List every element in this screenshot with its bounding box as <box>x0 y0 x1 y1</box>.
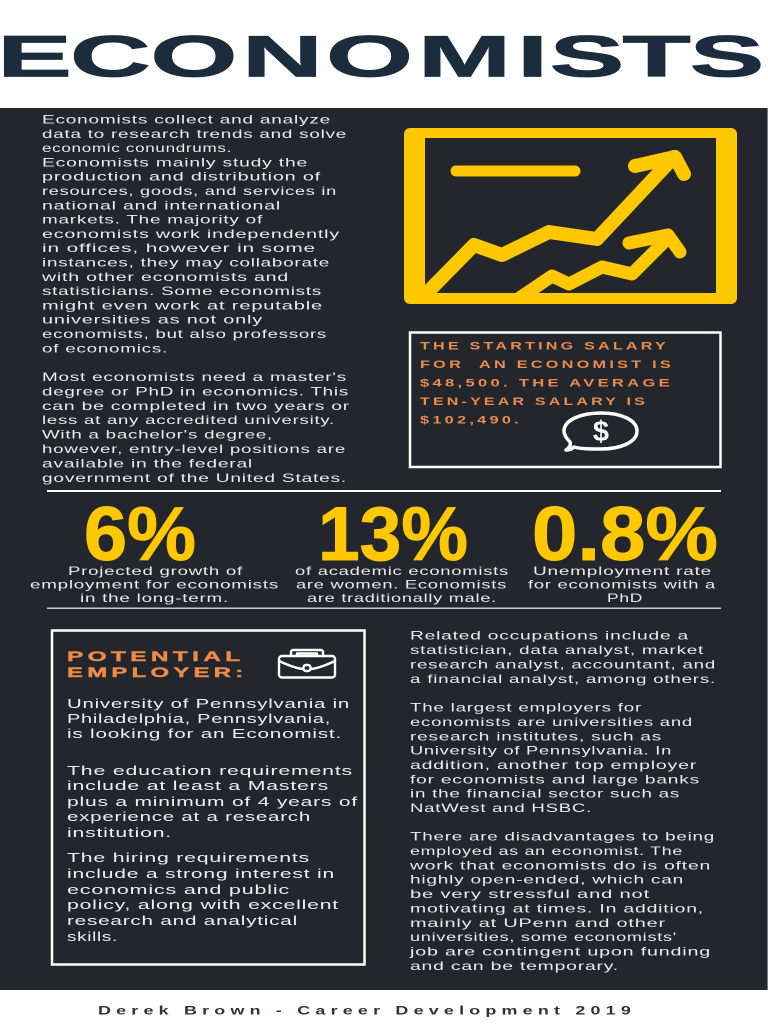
panel: starting salary <box>410 332 720 467</box>
text block: job location: University of Pennsylvania in <box>67 696 350 711</box>
statistic: 0.8%: 0.8% <box>532 492 718 577</box>
text block: job location: is looking for an Economist. <box>67 726 342 741</box>
panel: potential employer <box>52 630 364 964</box>
icon: dollar speech bubble <box>564 413 637 450</box>
text block: disadvantages: universities, some economists' <box>410 930 677 944</box>
icon: rising chart <box>404 128 737 304</box>
text block: largest employers: addition, another top employer <box>410 758 697 772</box>
text block: hiring requirements: research and analytical <box>67 913 298 928</box>
text block: disadvantages: motivating at times. In addition, <box>410 901 704 915</box>
heading: potential employer: POTENTIAL <box>67 648 244 664</box>
text block: related occupations <box>410 628 716 686</box>
text block: largest employers: research institutes, such as <box>410 729 662 743</box>
text block: hiring requirements: include a strong interest in <box>67 866 335 881</box>
text block: introduction: national and international <box>42 198 281 212</box>
text block: education: degree or PhD in economics. This <box>42 384 349 398</box>
divider: top of statistics <box>47 490 721 492</box>
text block: salary figures: THE STARTING SALARY <box>420 340 669 352</box>
text block: introduction: Economists collect and analyze <box>42 112 331 126</box>
text block: disadvantages <box>408 830 715 973</box>
statistic: 6%: Projected growth of <box>68 564 243 578</box>
text block: disadvantages: be very stressful and not <box>410 887 650 901</box>
text block: education requirements: institution. <box>67 825 172 840</box>
text block: hiring requirements: policy, along with excellent <box>67 897 339 912</box>
statistic: 0.8%: PhD <box>607 591 643 605</box>
text block: education: With a bachelor's degree, <box>42 428 273 442</box>
text block: introduction: in offices, however in some <box>42 241 316 255</box>
text block: disadvantages: There are disadvantages to being <box>410 830 715 844</box>
text block: related occupations: statistician, data analyst, market <box>410 643 704 657</box>
footer credit: Derek Brown - Career Development 2019 <box>98 1004 636 1018</box>
text block: introduction: resources, goods, and services in <box>42 184 337 198</box>
text block: hiring requirements: economics and public <box>67 882 290 897</box>
text block: hiring requirements <box>67 850 339 944</box>
text block: disadvantages: employed as an economist. The <box>410 844 683 858</box>
text block: education: available in the federal <box>42 456 253 470</box>
text block: largest employers: NatWest and HSBC. <box>410 801 592 815</box>
text block: largest employers: The largest employers for <box>410 700 642 714</box>
text block: largest employers: in the financial sector such as <box>410 787 680 801</box>
text block: hiring requirements: The hiring requirements <box>67 850 310 865</box>
statistic: 0.8%: Unemployment rate <box>533 564 712 578</box>
text block: introduction: might even work at reputable <box>42 298 323 312</box>
text block: introduction: with other economists and <box>40 270 289 284</box>
text block: education requirements: include at least a Masters <box>67 778 329 793</box>
text block: education: government of the United States. <box>42 471 347 485</box>
text block: introduction: markets. The majority of <box>42 213 263 227</box>
text block: education requirements: The education requirements <box>67 763 353 778</box>
icon: dollar speech bubble: $ <box>593 416 609 448</box>
title: ECONOMISTS <box>0 24 764 89</box>
text block: education: can be completed in two years or <box>42 399 350 413</box>
text block: introduction: of economics. <box>42 341 168 355</box>
text block: job location: Philadelphia, Pennsylvania, <box>67 711 331 726</box>
text block: education requirements: plus a minimum of 4 years of <box>67 794 358 809</box>
text block: largest employers: University of Pennsylvania. In <box>410 744 672 758</box>
text block: salary figures: TEN-YEAR SALARY IS <box>420 396 648 408</box>
text block: hiring requirements: skills. <box>67 929 118 944</box>
text block: disadvantages: mainly at UPenn and other <box>410 916 666 930</box>
statistic: 0.8%: for economists with a <box>528 578 716 592</box>
text block: education: less at any accredited university. <box>42 413 335 427</box>
heading: potential employer: EMPLOYER: <box>67 664 248 680</box>
statistic: 6%: employment for economists <box>30 578 279 592</box>
statistic: 0.8% <box>528 492 718 605</box>
text block: introduction: data to research trends and solve <box>42 127 347 141</box>
statistic: 13% <box>295 492 509 605</box>
text block: introduction: Economists mainly study the <box>42 155 308 169</box>
icon: briefcase <box>279 650 335 678</box>
statistic: 13%: are traditionally male. <box>307 591 497 605</box>
text block: largest employers <box>410 700 700 815</box>
text block: related occupations: a financial analyst, among others. <box>410 672 716 686</box>
statistic: 6%: in the long-term. <box>80 591 229 605</box>
text block: disadvantages: and can be temporary. <box>410 959 619 973</box>
text block: introduction: economic conundrums. <box>42 141 232 155</box>
text block: education <box>42 370 350 485</box>
text block: disadvantages: highly open-ended, which can <box>410 873 684 887</box>
text block: job location <box>67 696 350 741</box>
text block: salary figures <box>420 340 674 426</box>
text block: introduction: economists work independently <box>42 227 340 241</box>
text block: education: however, entry-level positions are <box>42 442 346 456</box>
text block: disadvantages: work that economists do is often <box>408 858 711 872</box>
text block: salary figures: $102,490. <box>420 414 522 426</box>
text block: disadvantages: job are contingent upon funding <box>408 945 711 959</box>
statistic: 6%: 6% <box>84 492 196 577</box>
statistic: 13%: are women. Economists <box>296 578 507 592</box>
divider: bottom of statistics <box>47 608 721 609</box>
text block: largest employers: for economists and large banks <box>410 772 700 786</box>
text block: largest employers: economists are universities and <box>410 715 693 729</box>
statistic: 13%: of academic economists <box>295 564 509 578</box>
text block: introduction: economists, but also professors <box>42 327 327 341</box>
text block: introduction: universities as not only <box>42 313 263 327</box>
text block: salary figures: $48,500. THE AVERAGE <box>420 378 673 390</box>
text block: education: Most economists need a master's <box>42 370 347 384</box>
statistic: 6% <box>30 492 279 605</box>
heading: potential employer <box>67 648 248 680</box>
statistic: 13%: 13% <box>318 492 468 577</box>
text block: introduction <box>40 112 347 355</box>
text block: introduction: instances, they may collaborate <box>42 256 330 270</box>
text block: introduction: production and distribution of <box>42 170 321 184</box>
text block: related occupations: research analyst, accountant, and <box>410 658 716 672</box>
text block: related occupations: Related occupations include a <box>410 628 689 642</box>
text block: education requirements <box>67 763 358 840</box>
text block: salary figures: FOR AN ECONOMIST IS <box>420 359 674 371</box>
text block: education requirements: experience at a research <box>67 809 311 824</box>
text block: introduction: statisticians. Some economists <box>42 284 322 298</box>
